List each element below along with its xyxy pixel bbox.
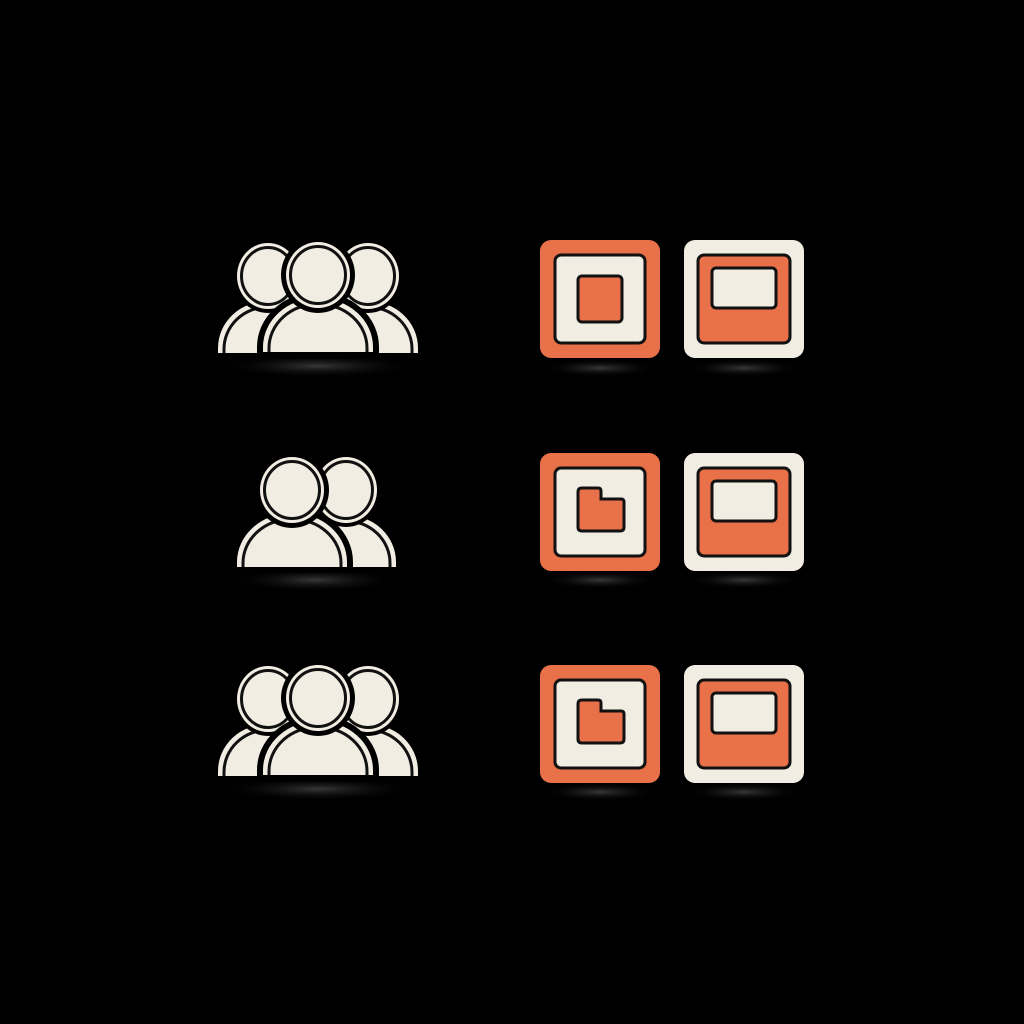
row 2: orange box with folder: [540, 453, 660, 589]
row 1: cream box with window: [684, 240, 804, 377]
row 2: cream box with window: [684, 453, 804, 589]
row 2: people pair: [230, 452, 400, 592]
row 1: orange box with square: [540, 240, 660, 377]
row 3: cream box with window: [684, 665, 804, 801]
row 3: orange box with folder: [540, 665, 660, 801]
row 1: people group of three: [218, 237, 418, 378]
row 3: people group of three: [218, 660, 418, 801]
